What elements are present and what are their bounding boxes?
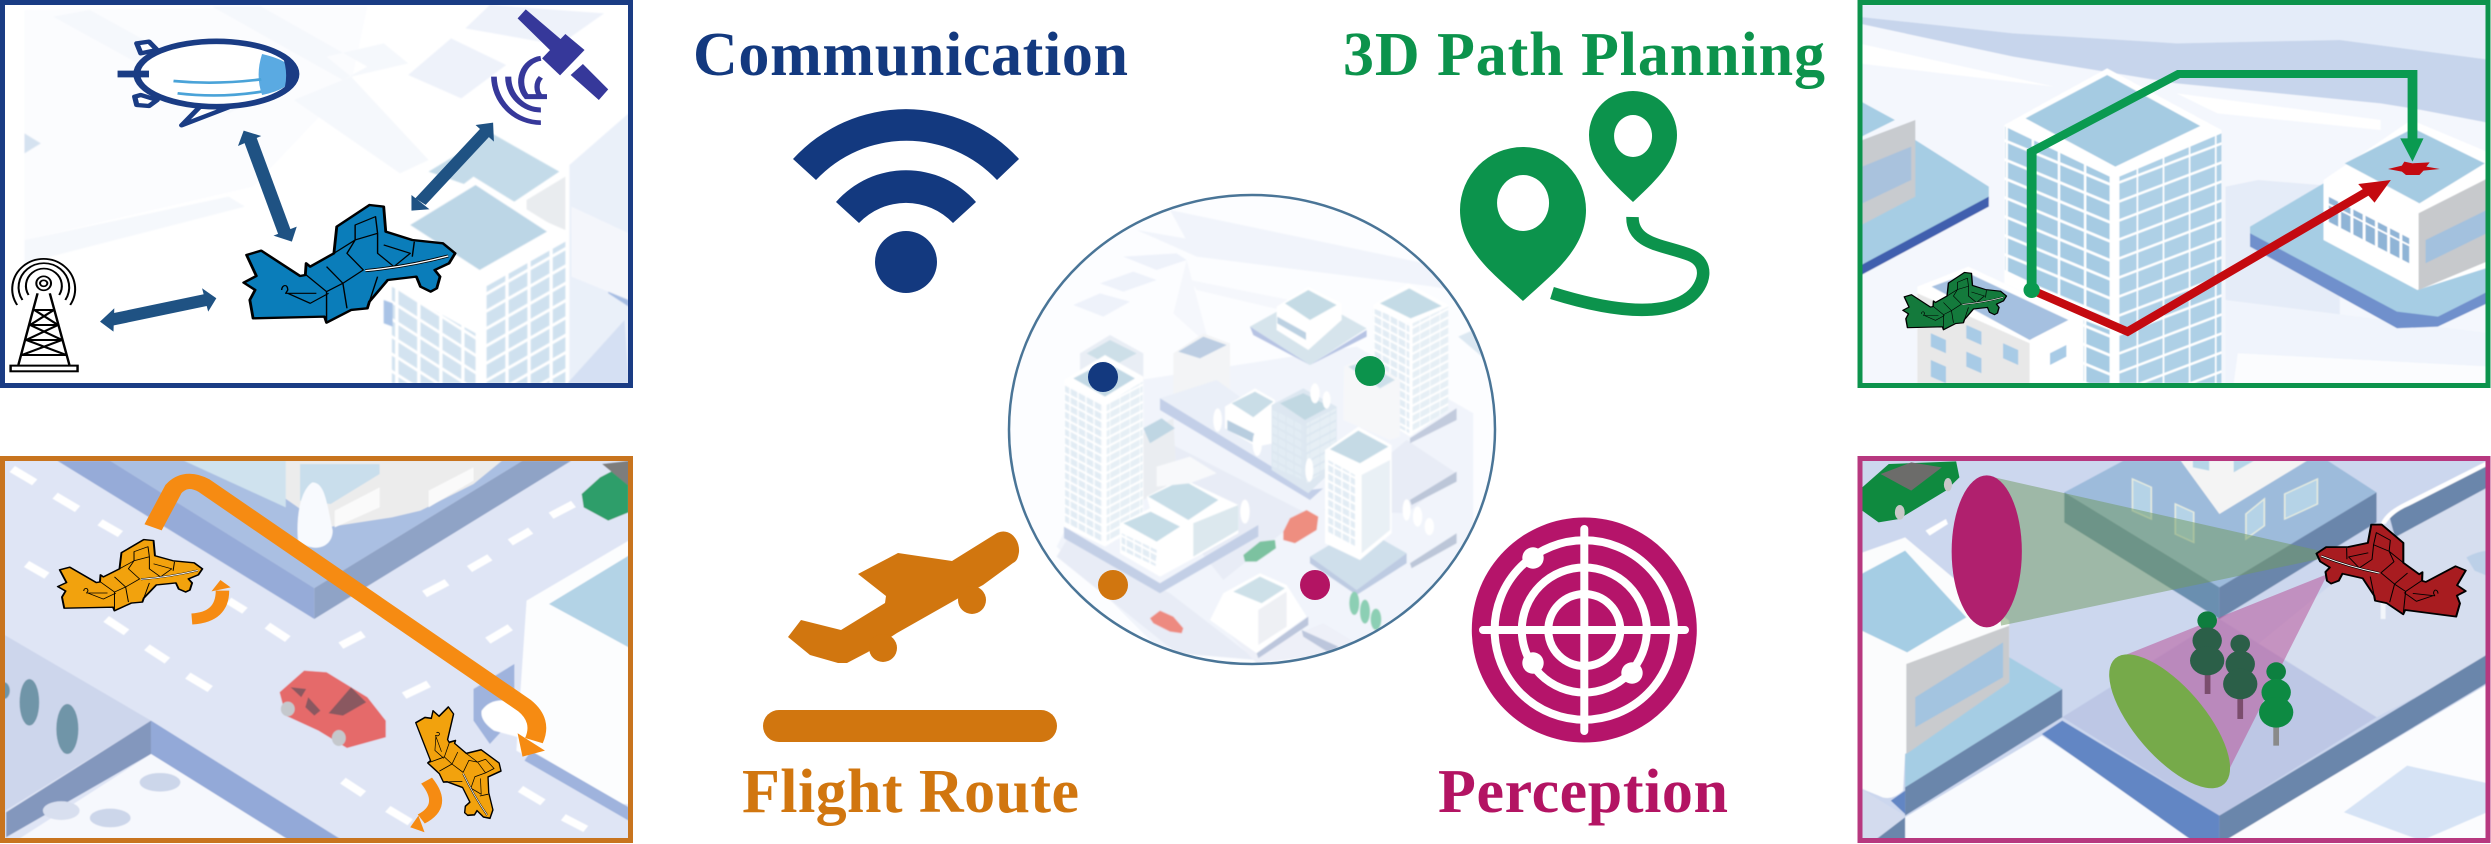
heading: Perception: Perception — [1438, 758, 1728, 826]
icon: take-off plane and runway — [763, 531, 1057, 742]
street lane — [1057, 437, 1457, 660]
building: right island — [2250, 120, 2491, 328]
icon: radio tower — [11, 259, 78, 371]
marker: communication dot — [1088, 362, 1118, 392]
sensor target: green ellipse — [2109, 654, 2230, 788]
icon: blue aircraft — [244, 205, 455, 323]
panel border: 3D path planning — [1860, 2, 2488, 386]
icon: map pins with path — [1460, 91, 1703, 310]
route: long flight path arrow — [153, 481, 545, 757]
icon: orange aircraft upper — [58, 540, 202, 611]
icon: radar — [1472, 518, 1697, 742]
icon: satellite — [494, 9, 608, 123]
icon: airship — [118, 41, 296, 125]
route: red direct path — [2032, 180, 2391, 332]
building: central tower — [2004, 68, 2221, 383]
vehicles: red car — [1150, 611, 1183, 633]
building: center grid tower — [1272, 388, 1337, 493]
heading: Flight Route: Flight Route — [742, 758, 1079, 826]
marker: flight route dot — [1098, 570, 1128, 600]
panel: 3D path planning scene — [1850, 0, 2491, 400]
center illustration: isometric city — [1000, 180, 1510, 680]
panel: communication scene — [0, 0, 640, 400]
city background: blocks — [1850, 454, 2491, 844]
city background: road — [0, 454, 641, 844]
sensor target: magenta ellipse — [1952, 475, 2022, 627]
building: right mid apartment — [1375, 370, 1400, 427]
building: center low — [1225, 388, 1275, 447]
building: small foreground block — [1917, 267, 2083, 383]
heading: 3D Path Planning: 3D Path Planning — [1343, 21, 1825, 89]
building: lower center — [1210, 573, 1307, 653]
city background: communication — [24, 5, 629, 383]
marker: path planning dot — [1355, 356, 1385, 386]
marker: red target star — [2388, 162, 2440, 175]
icon: green aircraft — [1903, 272, 2006, 330]
city background: rooftops — [1850, 0, 2491, 400]
trees — [1349, 592, 1381, 630]
sensor beam: pink field of view — [2126, 575, 2326, 768]
vehicle: green car — [582, 461, 631, 521]
sensor beam: green field of view — [1987, 476, 2319, 626]
vehicle: red car — [280, 671, 386, 748]
vehicles: green car — [1243, 540, 1276, 562]
building: right foreground tower — [1325, 427, 1392, 560]
route: green planned path — [2023, 74, 2424, 298]
icon: red aircraft — [2316, 524, 2467, 618]
icon: wifi — [793, 109, 1019, 293]
building: far right tower — [1381, 360, 1448, 436]
building: left island — [1858, 100, 1989, 277]
icon: orange aircraft lower — [415, 706, 502, 820]
marker: perception dot — [1300, 570, 1330, 600]
building: big left tower — [1080, 335, 1143, 387]
panel border: flight route — [2, 458, 630, 840]
building: lower left complex — [1120, 478, 1238, 577]
building: middle apartment — [1174, 336, 1229, 374]
arrow: satellite link — [411, 123, 494, 211]
vehicle: green car — [1862, 461, 1959, 522]
arrow: airship link — [238, 131, 297, 242]
panel: flight route scene — [0, 454, 641, 844]
arrow: ground tower link — [100, 288, 216, 332]
panel border: communication — [2, 2, 630, 386]
panel border: perception — [1860, 458, 2488, 840]
circle outline — [1009, 195, 1495, 664]
tree group — [2190, 611, 2293, 746]
panel: perception scene — [1850, 454, 2491, 844]
heading: Communication: Communication — [693, 21, 1128, 89]
building: top low block — [1250, 312, 1366, 365]
arrow: lower turn — [410, 781, 436, 832]
vehicles: red truck — [1283, 510, 1318, 543]
arrow: upper turn — [192, 580, 231, 619]
